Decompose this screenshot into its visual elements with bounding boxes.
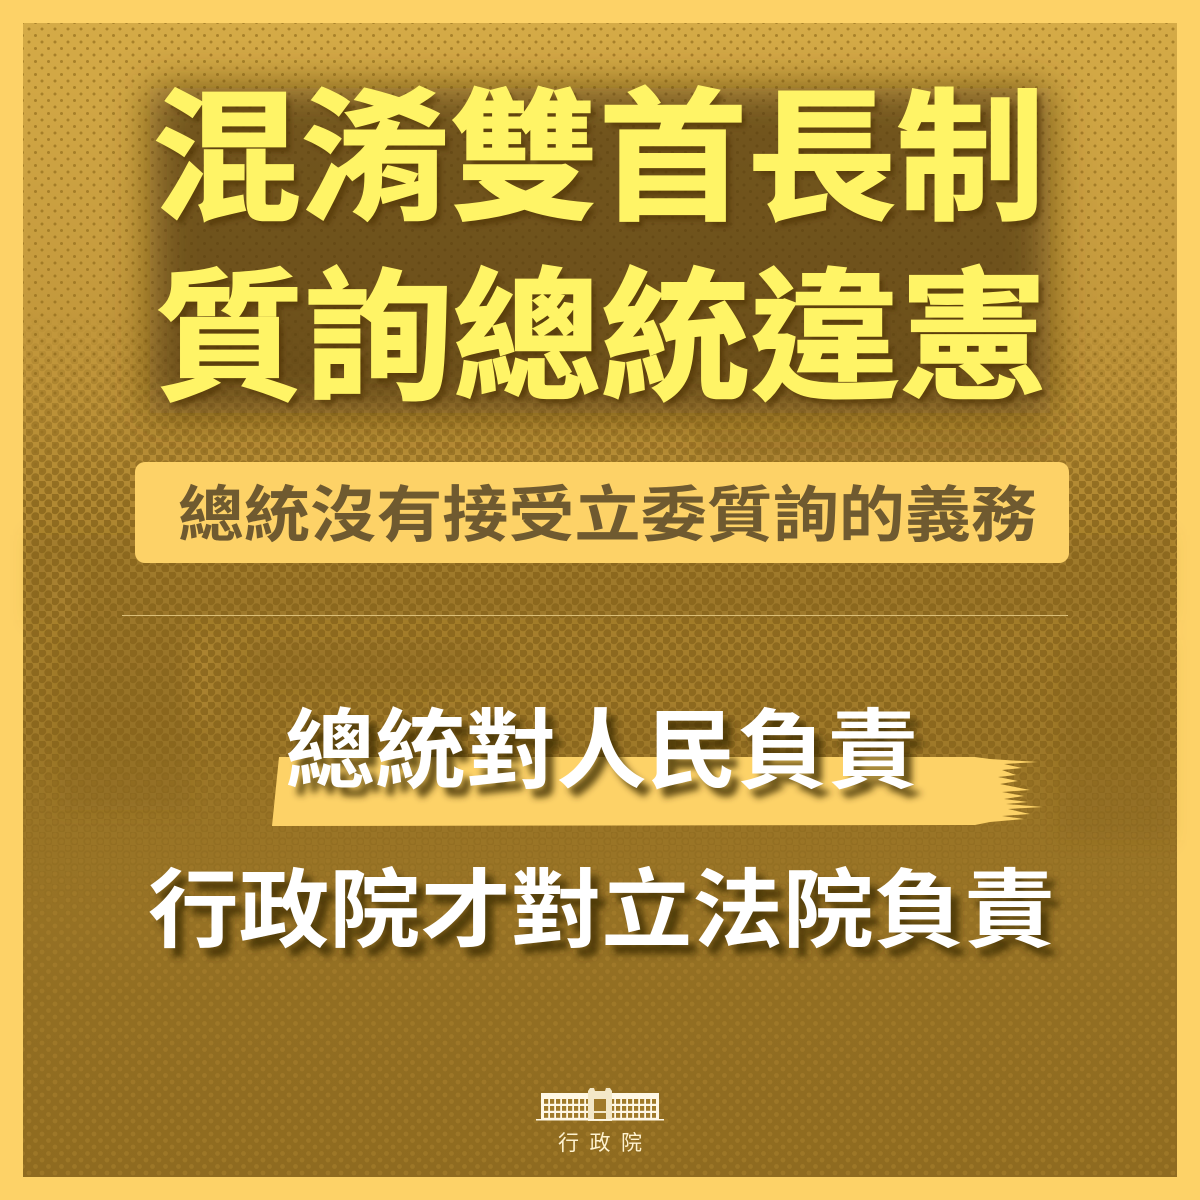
statement 2: 行政院才對立法院負責 [148, 863, 1055, 959]
statement 1: 總統對人民負責 [285, 703, 918, 800]
subtitle text: 總統沒有接受立委質詢的義務 [178, 481, 1037, 549]
title line 1: 混淆雙首長制 [152, 80, 1045, 239]
statement 2 shadow: 行政院才對立法院負責 [156, 872, 1063, 968]
brush stroke highlight [272, 757, 1043, 826]
title line 2: 質詢總統違憲 [155, 260, 1048, 419]
subtitle banner [135, 462, 1069, 563]
title shadow: 混淆雙首長制 [157, 86, 1050, 245]
title shadow: 質詢總統違憲 [160, 266, 1053, 425]
title shadow [150, 86, 1053, 425]
logo: Executive Yuan building [536, 1088, 664, 1155]
logo text: 行政院 [558, 1132, 642, 1155]
statement 1 shadow: 總統對人民負責 [293, 712, 926, 809]
title [152, 80, 1048, 419]
